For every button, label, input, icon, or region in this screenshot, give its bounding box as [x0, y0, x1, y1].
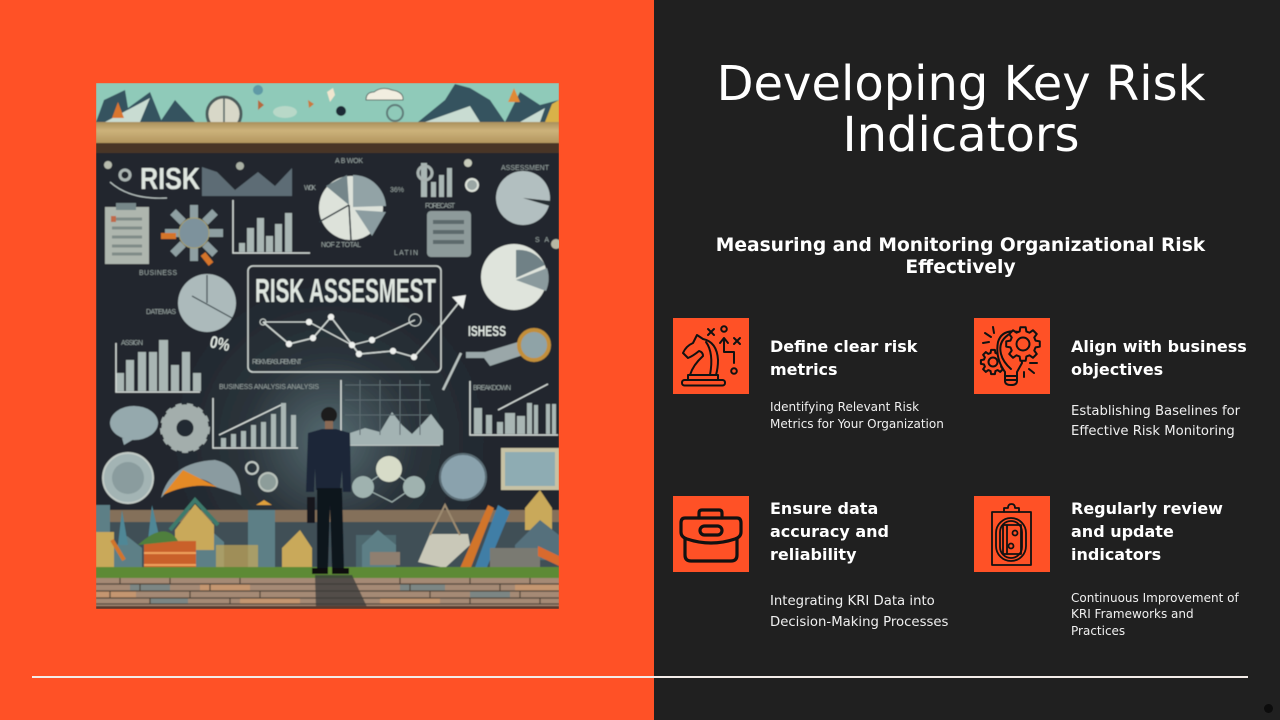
heading: Ensure data	[770, 499, 878, 518]
description	[1071, 404, 1240, 439]
illustration: analyst facing risk assessment chalkboard: FORECAST	[425, 203, 456, 210]
description: Decision-Making Processes	[770, 615, 948, 630]
description: Continuous Improvement of	[1071, 590, 1239, 604]
heading: objectives	[1071, 360, 1163, 379]
heading: indicators	[1071, 545, 1161, 564]
text: align with business objectives	[1071, 337, 1247, 439]
chalkboard	[96, 153, 559, 523]
heading	[770, 337, 918, 379]
text: regularly review and update indicators	[1071, 499, 1239, 638]
analyst figure	[306, 407, 351, 574]
heading: and update	[1071, 522, 1174, 541]
sky strip	[96, 83, 559, 123]
heading: reliability	[770, 545, 856, 564]
bar charts	[116, 163, 556, 447]
illustration: analyst facing risk assessment chalkboard: ISHESS	[468, 323, 506, 340]
subtitle: Measuring and Monitoring Organizational Risk	[716, 235, 1205, 256]
risk assessment frame and line chart	[248, 266, 464, 372]
heading	[1071, 337, 1247, 379]
clipboard	[105, 203, 149, 264]
illustration: analyst facing risk assessment chalkboard: 0%	[208, 332, 232, 355]
heading	[770, 499, 889, 564]
illustration: analyst facing risk assessment chalkboard: RISK MEASUREMENT	[252, 359, 303, 366]
description: KRI Frameworks and	[1071, 607, 1194, 621]
description: Establishing Baselines for	[1071, 404, 1240, 419]
illustration: analyst facing risk assessment chalkboard: NOF Z TOTAL	[321, 242, 361, 249]
board area chart top	[202, 167, 292, 196]
icon: clipboard review	[974, 496, 1050, 572]
illustration: analyst facing risk assessment chalkboard: DATEMAS	[146, 309, 176, 316]
small corner mark	[1264, 704, 1273, 713]
icon: briefcase	[673, 496, 749, 572]
description: Identifying Relevant Risk	[770, 400, 919, 414]
subtitle	[716, 235, 1206, 278]
grass	[96, 567, 559, 579]
description	[1071, 590, 1239, 638]
heading	[1071, 499, 1223, 564]
description: Metrics for Your Organization	[770, 417, 944, 431]
icon: gears lightbulb	[974, 318, 1050, 394]
orange left panel	[0, 0, 654, 720]
footer divider line	[32, 676, 1248, 678]
heading: Regularly review	[1071, 499, 1223, 518]
illustration: analyst facing risk assessment chalkboard: 36%	[390, 187, 404, 194]
text: define clear risk metrics	[770, 337, 944, 431]
description: Practices	[1071, 624, 1125, 638]
gear burst	[165, 205, 223, 261]
illustration: analyst facing risk assessment chalkboard: ASSIGN	[121, 340, 143, 347]
speech bubble, gears and dials	[110, 406, 158, 440]
description: Integrating KRI Data into	[770, 594, 935, 609]
icon: chess knight strategy	[673, 318, 749, 394]
heading: Align with business	[1071, 337, 1247, 356]
description: Effective Risk Monitoring	[1071, 424, 1235, 439]
wood shelf	[96, 122, 559, 143]
illustration: analyst facing risk assessment chalkboard: LATIN	[394, 250, 418, 257]
illustration: analyst facing risk assessment chalkboard: BUSINESS	[139, 270, 177, 277]
main title: Indicators	[842, 107, 1080, 163]
illustration: analyst facing risk assessment chalkboard	[96, 83, 559, 609]
main title: Developing Key Risk	[717, 56, 1205, 112]
heading: metrics	[770, 360, 838, 379]
illustration: analyst facing risk assessment chalkboard: WOK	[304, 185, 316, 192]
brick path	[96, 578, 559, 609]
illustration: analyst facing risk assessment chalkboard: BUSINESS ANALYSIS ANALYSIS	[219, 384, 319, 391]
pie charts	[178, 171, 551, 332]
area chart beside figure	[344, 412, 443, 445]
text: ensure data accuracy and reliability	[770, 499, 948, 630]
illustration: analyst facing risk assessment chalkboard: SA	[535, 237, 549, 244]
heading: Define clear risk	[770, 337, 917, 356]
small panel	[427, 211, 471, 257]
description	[770, 594, 948, 630]
illustration: analyst facing risk assessment chalkboard: BREAKDOWN	[473, 385, 511, 392]
illustration: analyst facing risk assessment chalkboard: RISK	[140, 161, 200, 196]
village and stationery	[96, 510, 559, 530]
illustration: analyst facing risk assessment chalkboard: A B WOK	[335, 158, 363, 165]
heading: accuracy and	[770, 522, 889, 541]
description	[770, 400, 944, 431]
illustration: analyst facing risk assessment chalkboard: RISK ASSESMEST	[255, 272, 436, 309]
illustration: analyst facing risk assessment chalkboard: ASSESSMENT	[501, 165, 550, 172]
main title	[717, 56, 1206, 163]
subtitle: Effectively	[905, 257, 1016, 278]
